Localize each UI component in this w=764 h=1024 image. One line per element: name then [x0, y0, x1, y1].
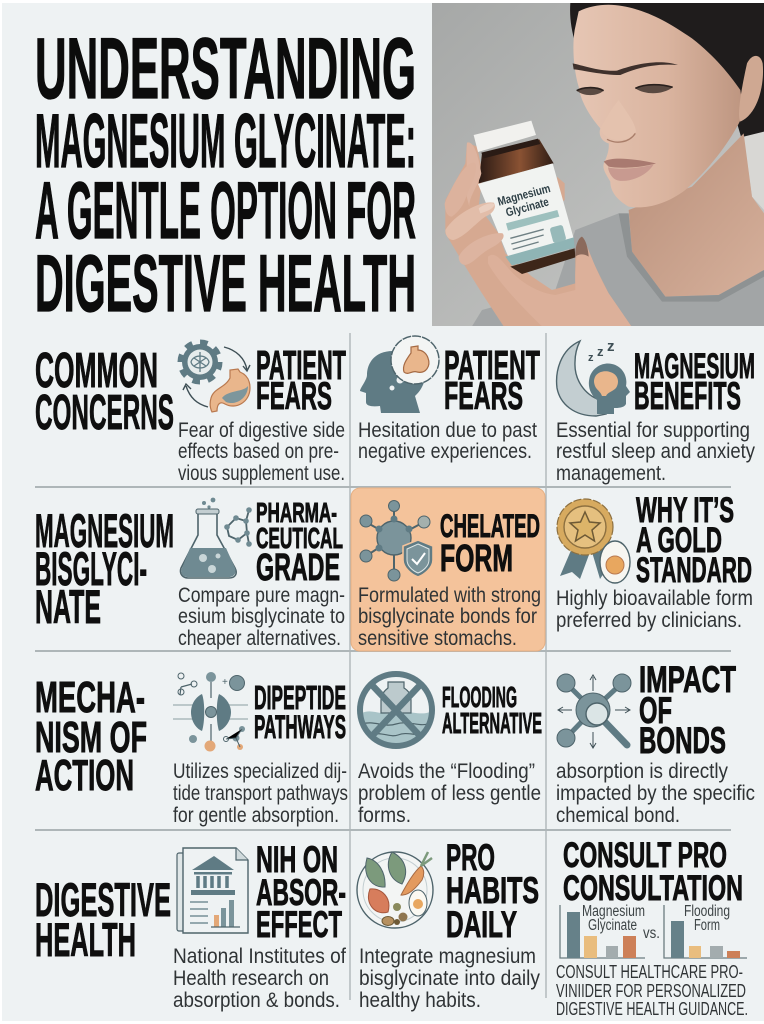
text: CONCERNS [35, 386, 174, 440]
title: UNDERSTANDING [35, 21, 416, 117]
body text [173, 944, 346, 1012]
heading: DAILY [446, 904, 517, 945]
icon: molecule under magnifying glass [557, 674, 631, 748]
section label: magnesium bisglycinate: NATE [35, 580, 101, 633]
heading: PATIENT [256, 342, 346, 388]
section label: common concerns: COMMON [35, 344, 158, 398]
body text: Hesitation due to past [358, 418, 537, 442]
panel: dipeptide pathways [173, 672, 348, 827]
icon: moon and head with brain: z [597, 344, 604, 359]
section label: magnesium bisglycinate [35, 504, 174, 633]
heading: CHELATED [440, 508, 540, 544]
body text [556, 759, 755, 827]
heading: GRADE [256, 547, 340, 589]
body text: effects based on pre- [178, 439, 339, 463]
heading: DIPEPTIDE [254, 679, 346, 716]
body text [178, 418, 345, 485]
body text: absorption is directly [556, 759, 728, 783]
body text [178, 583, 345, 650]
body text: esium bisglycinate to [178, 604, 345, 628]
heading: EFFECT [256, 904, 342, 945]
body text: problem of less gentle [358, 781, 541, 805]
heading [639, 659, 736, 761]
body text [556, 586, 753, 632]
body text: absorption & bonds. [173, 988, 340, 1012]
heading: ALTERNATIVE [442, 708, 542, 740]
panel: patient fears, digestive side effects [178, 342, 346, 485]
section label: digestive health [35, 873, 171, 966]
icon: prohibited flooding sign [359, 673, 433, 747]
body text: Compare pure magn- [178, 583, 345, 607]
icon: dipeptide transport channel: + [222, 677, 228, 688]
body text [556, 418, 755, 485]
body text [556, 961, 748, 1019]
heading: PHARMA- [256, 497, 337, 528]
shoulder highlight [744, 132, 764, 210]
icon: chelated molecule with shield [360, 500, 433, 581]
nose [600, 100, 636, 140]
body text: Fear of digestive side [178, 418, 345, 442]
bottle: Glycinate [504, 195, 551, 220]
highlighted cell background [351, 488, 545, 651]
heading: FORM [440, 538, 513, 580]
heading [256, 839, 346, 945]
heading [563, 836, 743, 908]
panel: flooding alternative [358, 673, 542, 827]
body text: Avoids the “Flooding” [358, 759, 535, 783]
heading: CEUTICAL [256, 523, 343, 555]
body text: Utilizes specialized dij- [173, 759, 347, 783]
neck [629, 133, 764, 297]
heading [440, 508, 540, 580]
icon: moon and head with brain: z [588, 352, 594, 364]
body text: Integrate magnesium [359, 944, 536, 968]
body text: sensitive stomachs. [358, 626, 517, 650]
body text: cheaper alternatives. [178, 626, 341, 650]
shirt [472, 213, 764, 326]
ear [739, 56, 763, 122]
heading: OF [639, 690, 672, 731]
body text [173, 759, 348, 827]
body text: negative experiences. [358, 439, 532, 463]
bar chart: magnesium glycinate vs flooding form: Flooding [684, 903, 730, 920]
body text: Health research on [173, 966, 329, 990]
heading: HABITS [446, 870, 539, 911]
section label: mechanism of action: NISM OF [35, 713, 147, 762]
bar chart: magnesium glycinate vs flooding form: Glycinate [588, 917, 637, 934]
lips [604, 159, 656, 168]
icon: dipeptide transport channel [173, 672, 248, 752]
title [35, 21, 416, 329]
body text: for gentle absorption. [173, 803, 339, 827]
heading: FEARS [256, 375, 332, 418]
body text [358, 583, 541, 650]
section label: common concerns [35, 344, 174, 440]
grid lines [35, 333, 731, 1000]
hair [570, 3, 764, 140]
heading [634, 347, 755, 418]
heading [444, 342, 540, 418]
panel: why it's a gold standard [556, 491, 753, 632]
heading: ABSOR- [256, 872, 346, 913]
panel: pro habits daily [357, 837, 540, 1012]
panel: chelated form (highlighted) [358, 500, 541, 650]
icon: gold medal with egg [557, 499, 630, 583]
icon: moon and head with brain [557, 338, 630, 416]
heading [446, 837, 539, 945]
bar chart: magnesium glycinate vs flooding form: vs. [643, 925, 660, 942]
heading [256, 497, 343, 589]
icon: head with thought bubble [360, 336, 439, 413]
section label: digestive health: HEALTH [35, 913, 136, 966]
heading: PATHWAYS [254, 709, 346, 745]
body text: vious supplement use. [178, 461, 345, 485]
heading [636, 491, 752, 590]
body text: National Institutes of [173, 944, 346, 968]
body text: healthy habits. [359, 988, 481, 1012]
icon: flask with molecule [180, 498, 252, 578]
text: MAGNESIUM [35, 504, 174, 557]
heading: NIH ON [256, 839, 338, 880]
icon: gear brain and stomach [180, 342, 250, 412]
icon: plate of healthy food [357, 852, 433, 928]
bar chart: magnesium glycinate vs flooding form: Magnesium [582, 903, 645, 920]
hand [445, 143, 631, 326]
body text [359, 944, 540, 1012]
body text [358, 418, 537, 463]
bottle: Magnesium [496, 181, 552, 209]
bottle [474, 121, 575, 274]
panel: NIH on absorption effect [173, 839, 346, 1012]
photo: woman examining a supplement bottle [432, 3, 764, 326]
icon: document with institution and chart [177, 848, 248, 933]
body text: management. [556, 461, 666, 485]
heading [256, 342, 346, 418]
bar chart: magnesium glycinate vs flooding form [560, 903, 747, 958]
section label: magnesium bisglycinate: BISGLYCI- [35, 542, 147, 595]
body text: Formulated with strong [358, 583, 541, 607]
section label: digestive health: DIGESTIVE [35, 873, 171, 926]
body text: bisglycinate bonds for [358, 604, 537, 628]
panel: patient fears, past experiences [358, 336, 540, 463]
heading [254, 679, 346, 745]
panel: pharmaceutical grade [178, 497, 345, 650]
brows [573, 62, 678, 75]
eyes [577, 85, 673, 95]
heading [442, 682, 542, 740]
body text: bisglycinate into daily [359, 966, 540, 990]
heading: FEARS [444, 375, 523, 418]
body text: chemical bond. [556, 803, 680, 827]
heading: FLOODING [442, 682, 517, 714]
section label: mechanism of action: ACTION [35, 751, 134, 800]
face [573, 5, 744, 207]
fingers over bottle [467, 142, 481, 207]
section label: mechanism of action: MECHA- [35, 673, 145, 722]
body text: tide transport pathways [173, 781, 348, 805]
icon: moon and head with brain: z [607, 338, 614, 355]
body text: forms. [358, 803, 411, 827]
bar chart: magnesium glycinate vs flooding form: Form [694, 917, 720, 934]
heading: PATIENT [444, 342, 540, 388]
section label: mechanism of action [35, 673, 147, 800]
panel: impact of bonds [556, 659, 755, 827]
body text [358, 759, 541, 827]
panel: magnesium benefits [556, 338, 755, 485]
heading: PRO [446, 837, 495, 878]
panel: consult pro consultation [556, 836, 748, 1019]
